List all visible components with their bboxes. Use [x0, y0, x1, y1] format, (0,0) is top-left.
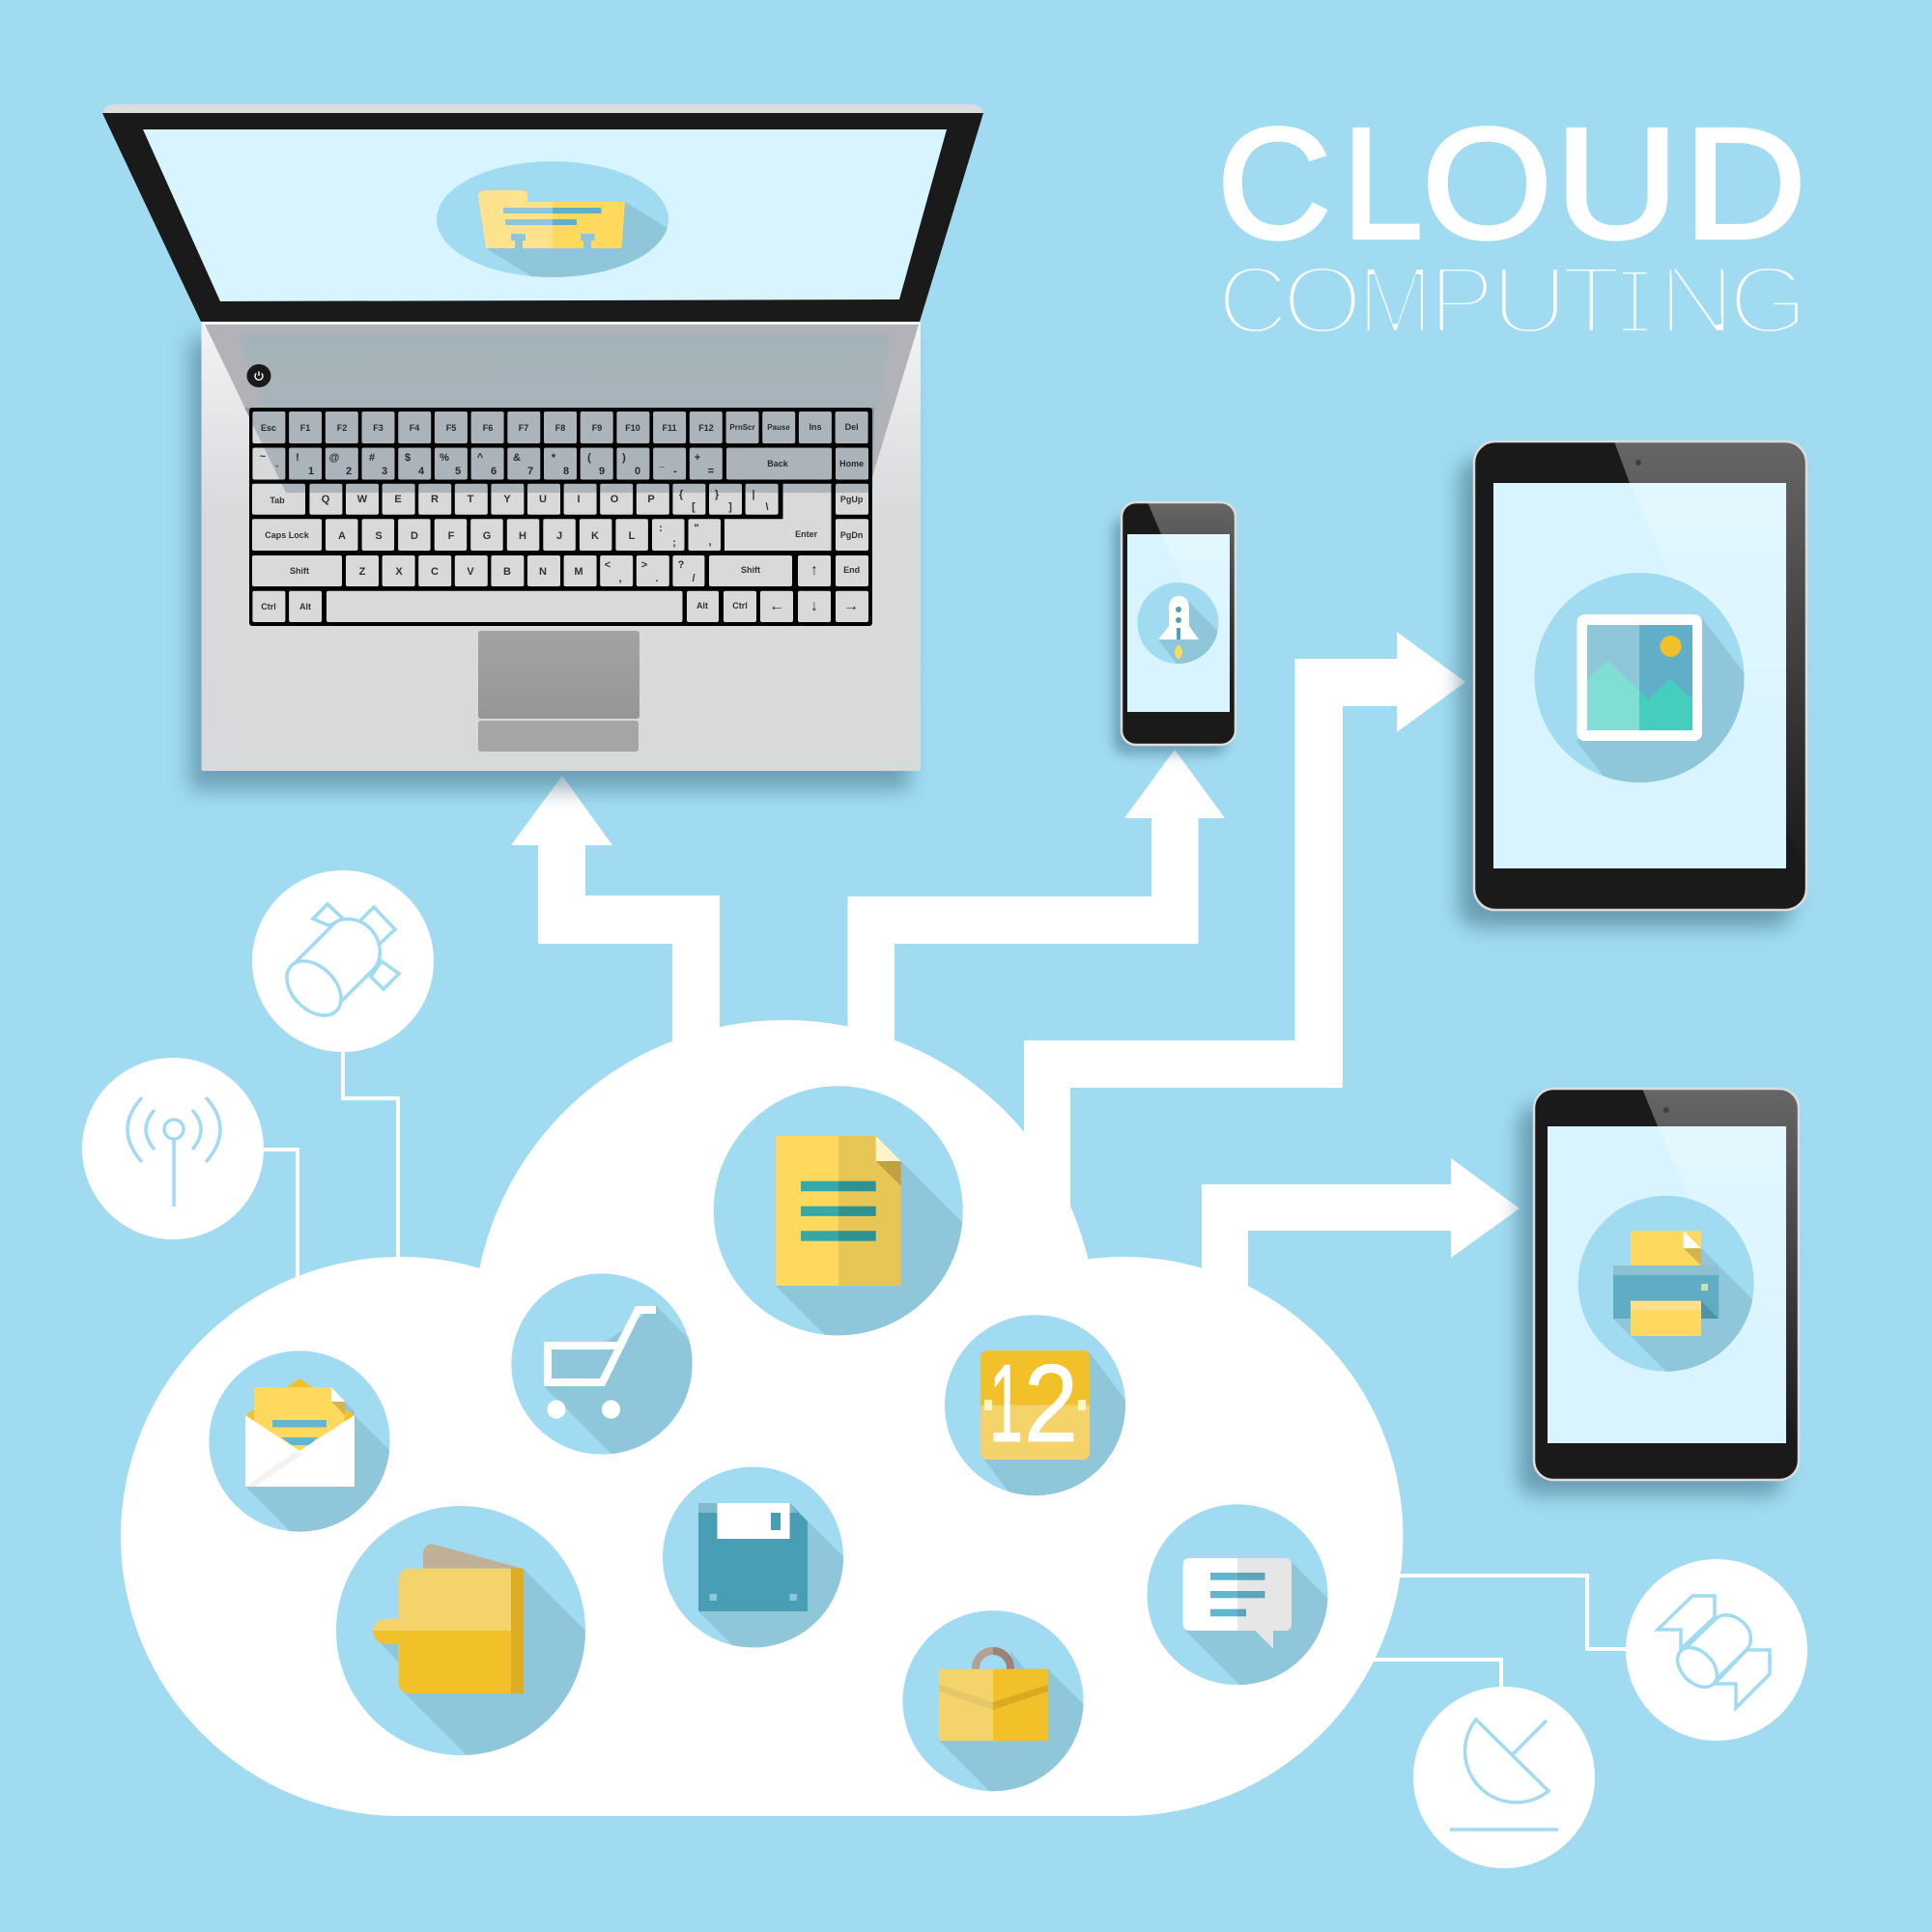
key labels: function row: Esc	[261, 423, 276, 433]
key labels: letters: .	[655, 573, 659, 584]
key labels: letters: →	[843, 598, 859, 614]
key labels: letters: :	[659, 523, 663, 534]
keyboard reflection overlay	[244, 408, 874, 493]
key labels: letters: V	[467, 566, 474, 578]
heading: COMPUTING: G	[1728, 246, 1808, 355]
key labels: letters: [	[692, 501, 696, 513]
key labels: letters: G	[483, 530, 491, 542]
key labels: function row: F4	[410, 423, 419, 433]
key labels: number row: =	[708, 466, 714, 477]
laptop screen	[143, 129, 947, 301]
key labels: letters: K	[591, 530, 599, 542]
small tablet	[1532, 1088, 1801, 1482]
phone frame	[1122, 502, 1236, 745]
calendar number: 1	[989, 1343, 1023, 1465]
key labels: letters: M	[574, 566, 583, 578]
heading: COMPUTING: I	[1614, 254, 1656, 363]
satellite dish circle	[1413, 1687, 1595, 1868]
key labels: letters: L	[629, 530, 636, 542]
heading: CLOUD: O	[1422, 95, 1552, 271]
key labels: number row: $	[405, 452, 411, 464]
key labels: number row: )	[622, 452, 626, 464]
satellite circle	[252, 870, 434, 1052]
arrow: cloud to phone	[848, 750, 1225, 1053]
key labels: back and home: Caps Lock	[265, 530, 310, 540]
key labels: letters: Y	[503, 494, 511, 505]
key labels: letters: ↑	[810, 562, 818, 579]
keyboard	[244, 408, 874, 626]
calendar number: 2	[1024, 1343, 1078, 1465]
heading: COMPUTING: C	[1217, 246, 1289, 355]
satellite two circle	[1626, 1559, 1807, 1741]
camera	[1663, 1107, 1669, 1113]
key labels: back and home: Enter	[795, 529, 818, 539]
large tablet screen	[1493, 483, 1786, 868]
heading: COMPUTING: O	[1282, 246, 1363, 355]
key labels: number row: 8	[563, 466, 569, 477]
key labels: function row: F12	[698, 423, 714, 433]
key labels: letters: J	[556, 530, 562, 542]
key labels: back and home	[261, 459, 864, 611]
laptop base	[201, 322, 921, 771]
key labels: letters: ?	[678, 559, 685, 571]
key labels: number row: +	[695, 452, 700, 464]
key labels: letters: W	[357, 494, 368, 505]
connector lines	[261, 1048, 1629, 1690]
icon: wallet	[336, 1506, 585, 1755]
key labels: letters: {	[679, 489, 684, 500]
key labels: function row: F10	[625, 423, 640, 433]
key labels: function row: F8	[555, 423, 565, 433]
key labels: number row: `	[275, 465, 279, 476]
camera	[1635, 460, 1641, 466]
arrow: cloud to laptop	[511, 776, 720, 1053]
icon: picture	[1534, 573, 1745, 782]
key labels: letters: ,	[708, 536, 712, 548]
key labels: number row: _	[658, 457, 666, 469]
key labels: letters: X	[395, 566, 403, 578]
arrow: cloud to small tablet	[1202, 1158, 1520, 1294]
key labels: letters: F	[448, 530, 455, 542]
heading: COMPUTING: U	[1491, 246, 1569, 355]
key labels: letters: N	[539, 566, 547, 578]
key labels: letters: H	[519, 530, 526, 542]
key labels: letters: ;	[672, 537, 676, 549]
key labels: back and home: Alt	[299, 602, 311, 611]
key labels: letters: <	[605, 559, 611, 571]
key labels: function row: PrnScr	[729, 423, 755, 432]
key labels: letters: U	[539, 494, 547, 505]
key labels: number row: &	[513, 452, 521, 464]
key labels: function row: F6	[483, 423, 493, 433]
icon: satellite	[276, 904, 399, 1026]
keys: qwerty row	[252, 484, 868, 551]
antenna circle	[82, 1058, 264, 1239]
keys: number row	[252, 448, 868, 479]
key labels: letters: \	[765, 501, 769, 513]
icon: shopping cart	[511, 1273, 693, 1455]
key labels: number row: 9	[599, 466, 605, 477]
heading: CLOUD: C	[1217, 95, 1331, 271]
key labels: back and home: End	[843, 565, 860, 575]
key labels: number row: #	[369, 452, 375, 464]
key labels: function row: Ins	[809, 422, 822, 432]
small tablet shadow	[1519, 1106, 1783, 1495]
key labels: back and home: Shift	[741, 565, 760, 575]
key labels: number row: !	[296, 452, 299, 464]
icon: briefcase	[902, 1610, 1084, 1791]
key labels: number row: 7	[527, 466, 533, 477]
key labels: number row: 5	[455, 466, 461, 477]
small tablet screen	[1548, 1126, 1786, 1443]
icon: dish	[1450, 1719, 1558, 1830]
touchpad	[478, 631, 639, 719]
key labels: back and home: Alt	[696, 601, 708, 611]
key labels: letters: E	[394, 494, 402, 505]
key labels: letters: ←	[769, 598, 784, 614]
key labels: letters: >	[641, 559, 647, 571]
key labels: function row	[261, 422, 859, 433]
icon: antenna	[128, 1097, 220, 1207]
arrow: cloud to large tablet	[1024, 632, 1465, 1208]
key labels: letters: C	[431, 566, 439, 578]
key labels: back and home: PgUp	[840, 495, 864, 504]
title: cloud computing	[1217, 95, 1808, 363]
keys: function row	[252, 412, 868, 443]
key labels: letters: |	[752, 489, 755, 500]
heading: CLOUD: D	[1684, 95, 1806, 271]
key labels: number row: 6	[491, 466, 497, 477]
key labels: function row: F3	[373, 423, 384, 433]
key labels: letters: B	[503, 566, 511, 578]
hinge reflection	[205, 325, 919, 493]
key labels: function row: F11	[662, 423, 677, 433]
key labels: letters: Q	[322, 494, 330, 505]
key labels: number row: *	[552, 452, 556, 464]
key labels: function row: F1	[300, 423, 310, 433]
key labels: back and home: Home	[839, 459, 864, 469]
key labels: letters: /	[692, 573, 696, 584]
keys: home row	[252, 519, 868, 551]
icon: calendar	[945, 1315, 1125, 1495]
key labels: number row: 4	[418, 466, 425, 477]
keys: bottom row	[252, 591, 868, 622]
key labels: back and home: Ctrl	[261, 602, 276, 611]
power button	[247, 364, 270, 387]
cloud shape	[121, 1020, 1403, 1816]
key labels: letters: D	[411, 530, 418, 542]
key labels: letters: A	[338, 530, 346, 542]
key labels: number row: %	[440, 452, 449, 464]
key labels: number row	[260, 451, 714, 477]
icon: rocket	[1138, 582, 1219, 664]
key labels: function row: F7	[519, 423, 528, 433]
key labels: letters: O	[611, 494, 619, 505]
key labels: back and home: Tab	[270, 496, 285, 505]
key labels: letters: R	[431, 494, 439, 505]
phone	[1122, 502, 1246, 745]
heading: CLOUD: L	[1343, 95, 1423, 271]
key labels: back and home: Back	[767, 459, 789, 469]
key labels: number row: 1	[308, 466, 314, 477]
key labels: function row: Pause	[767, 423, 790, 432]
key labels: back and home: PgDn	[840, 530, 863, 540]
laptop lid	[102, 104, 983, 322]
key labels: letters: P	[647, 494, 655, 505]
tablet frame	[1534, 1089, 1799, 1480]
heading: COMPUTING: M	[1357, 246, 1434, 355]
heading: COMPUTING: P	[1429, 246, 1494, 355]
key labels: letters: I	[577, 494, 581, 505]
keys: shift row	[252, 555, 868, 586]
tablet frame	[1474, 441, 1806, 910]
laptop	[102, 104, 983, 771]
key labels: function row: F2	[337, 423, 347, 433]
icon: folder on screen	[437, 161, 668, 277]
icon: satellite two	[1658, 1596, 1770, 1708]
key labels: letters: ↓	[810, 598, 818, 614]
touchpad button	[478, 721, 639, 752]
key labels: letters: T	[468, 494, 474, 505]
large tablet	[1472, 440, 1808, 912]
key labels: letters: ,	[618, 573, 622, 584]
large tablet shadow	[1459, 459, 1792, 927]
heading: COMPUTING: T	[1561, 246, 1622, 355]
key labels: back and home: Shift	[290, 566, 309, 576]
key labels: number row: 0	[635, 466, 640, 477]
laptop shadow	[189, 338, 909, 790]
key labels: back and home: Ctrl	[732, 601, 748, 611]
key labels: letters: S	[375, 530, 383, 542]
key labels: number row: 3	[382, 466, 387, 477]
key labels: function row: Del	[845, 422, 859, 432]
key labels: number row: -	[673, 466, 677, 477]
key labels: letters: Z	[359, 566, 366, 578]
icon: printer	[1578, 1196, 1754, 1372]
key labels: letters	[322, 489, 859, 614]
heading: CLOUD: U	[1555, 95, 1679, 271]
key labels: letters: }	[715, 489, 720, 500]
icon: floppy disk	[663, 1466, 843, 1648]
key labels: letters: ]	[728, 501, 732, 513]
heading: COMPUTING: N	[1658, 246, 1736, 355]
key labels: number row: ~	[260, 451, 267, 463]
phone screen	[1127, 534, 1230, 712]
key labels: function row: F9	[592, 423, 602, 433]
icon: chat bubble	[1148, 1504, 1327, 1685]
key labels: number row: @	[329, 452, 340, 464]
icon: document	[713, 1086, 963, 1335]
phone shadow	[1113, 517, 1227, 754]
key labels: letters: "	[694, 523, 699, 534]
key labels: number row: 2	[346, 466, 352, 477]
key labels: number row: ^	[477, 452, 484, 464]
icon: mail envelope	[209, 1350, 390, 1532]
key labels: number row: (	[587, 452, 591, 464]
key labels: function row: F5	[446, 423, 456, 433]
